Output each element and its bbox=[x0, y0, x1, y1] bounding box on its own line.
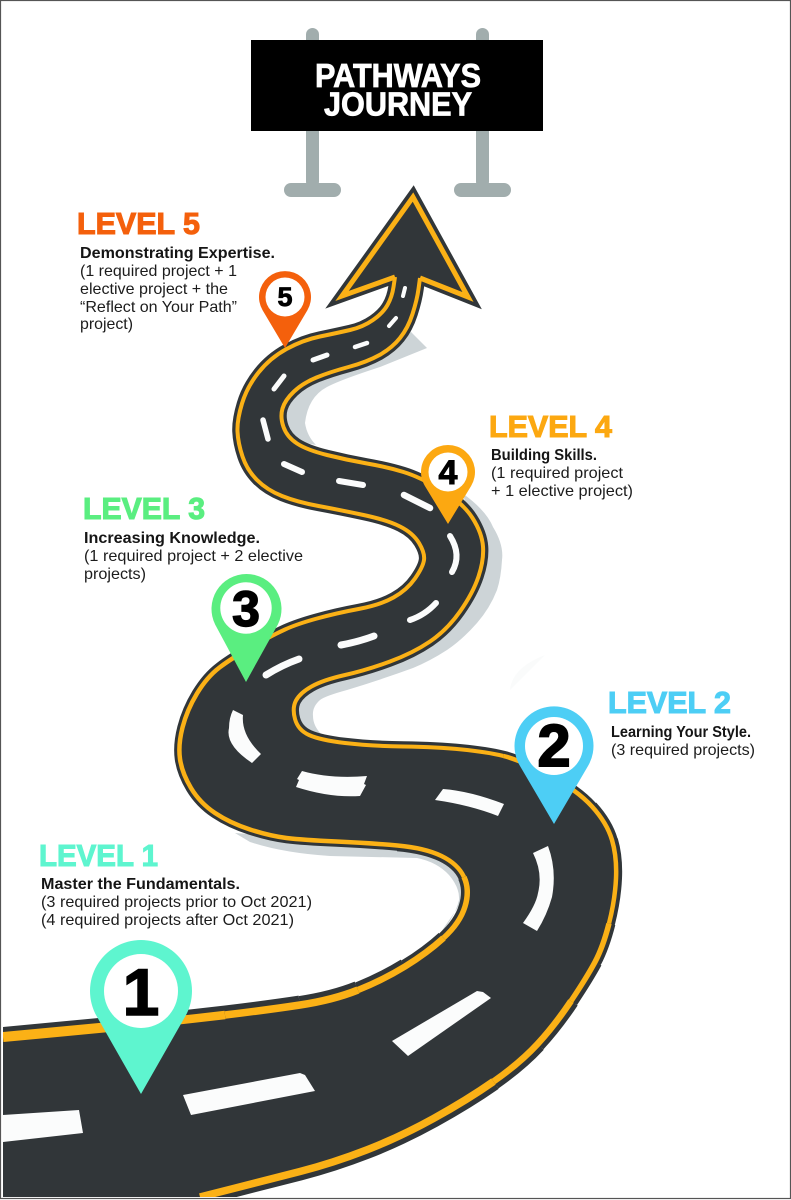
pin: level 5: 5 bbox=[277, 282, 293, 312]
text block: level 1: (3 required projects prior to Oct 2021) bbox=[41, 894, 312, 911]
pin: level 3 bbox=[212, 574, 282, 682]
text block: level 3: (1 required project + 2 elective bbox=[84, 548, 303, 565]
pin: level 3: 3 bbox=[232, 581, 260, 637]
pin: level 1 bbox=[90, 940, 192, 1094]
text block: level 3: LEVEL 3 bbox=[83, 491, 205, 526]
pin: level 4 bbox=[421, 445, 475, 524]
text block: level 3: Increasing Knowledge. bbox=[84, 530, 260, 547]
pin: level 4: 4 bbox=[439, 454, 458, 492]
text block: level 2: Learning Your Style. bbox=[611, 724, 751, 741]
text block: level 4 bbox=[489, 409, 633, 500]
text block: level 5: (1 required project + 1 bbox=[80, 263, 237, 280]
pin: level 2 bbox=[514, 706, 594, 824]
text block: level 4: LEVEL 4 bbox=[489, 409, 613, 444]
text block: level 5: Demonstrating Expertise. bbox=[80, 245, 275, 262]
text block: level 3: projects) bbox=[84, 566, 146, 583]
text block: level 5: “Reflect on Your Path” bbox=[80, 299, 237, 316]
title: JOURNEY bbox=[324, 86, 472, 122]
text block: level 4: Building Skills. bbox=[491, 447, 597, 464]
text block: level 5 bbox=[77, 206, 275, 333]
road surface bbox=[3, 197, 616, 1197]
title bbox=[315, 57, 481, 122]
text block: level 5: elective project + the bbox=[80, 281, 228, 298]
text block: level 1 bbox=[39, 838, 312, 929]
pin: level 2: 2 bbox=[538, 713, 570, 779]
text block: level 3 bbox=[83, 491, 303, 583]
text block: level 1: LEVEL 1 bbox=[39, 838, 158, 873]
road shadow bbox=[235, 325, 502, 970]
sign: Pathways Journey bbox=[251, 28, 543, 197]
pin: level 5 bbox=[259, 271, 311, 348]
road with arrow head bbox=[3, 197, 616, 1197]
text block: level 4: (1 required project bbox=[491, 465, 624, 482]
pin: level 1: 1 bbox=[123, 955, 159, 1029]
text block: level 5: LEVEL 5 bbox=[77, 206, 200, 241]
text block: level 2 bbox=[608, 685, 755, 759]
road centre dashes bbox=[3, 288, 554, 1142]
text block: level 4: + 1 elective project) bbox=[491, 483, 633, 500]
text block: level 2: LEVEL 2 bbox=[608, 685, 731, 720]
title: PATHWAYS bbox=[315, 57, 481, 94]
text block: level 2: (3 required projects) bbox=[611, 742, 755, 759]
road edge: dark shoulder bbox=[3, 197, 616, 1197]
text block: level 5: project) bbox=[80, 316, 133, 333]
road edge: yellow lines bbox=[3, 197, 616, 1197]
text block: level 1: Master the Fundamentals. bbox=[41, 876, 240, 893]
text block: level 1: (4 required projects after Oct 2021) bbox=[41, 912, 294, 929]
